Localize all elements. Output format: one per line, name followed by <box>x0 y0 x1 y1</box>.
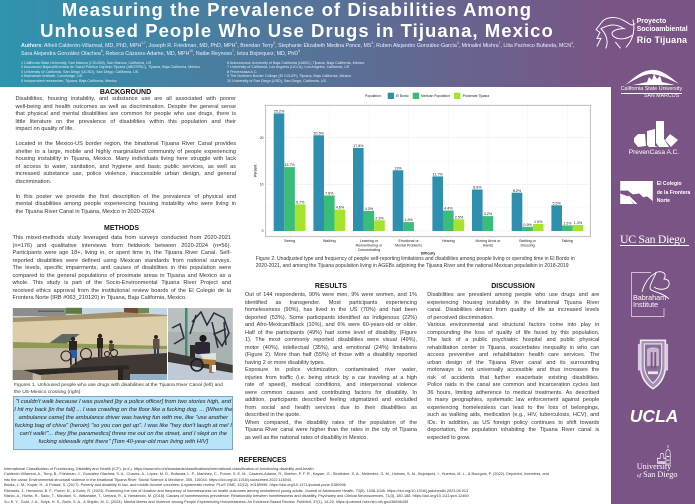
bars: seeing: 25.2% <box>274 110 285 114</box>
text block: results: from social and health services due to their disabilities as <box>245 405 417 411</box>
logo: El Colegio de la Frontera Norte <box>620 181 690 204</box>
caption: figure 1: Figures 1. Unhoused people who use drugs with disabilities at the Tijuana River Canal (left) and <box>14 382 223 388</box>
logo text <box>657 181 690 204</box>
bars: emotional <box>393 166 414 231</box>
bars: bathing <box>512 189 544 231</box>
bars: talking: 1.3% <box>574 221 583 225</box>
caption: figure 1: the US-Mexico crossing (right) <box>14 390 80 395</box>
text block: methods: Participants were age 18+, living in, or spent time in, the Tijuana River Canal. Self- <box>12 250 231 256</box>
text block: discussion: of perceived discrimination. <box>427 315 494 321</box>
logo text: Institute <box>633 300 658 309</box>
axis: difficulty categories: Dressing <box>521 243 535 247</box>
text block: discussion: experiencing homelessless can lead to the loss of belongings, <box>427 405 599 411</box>
axis: difficulty categories: Talking <box>562 239 573 243</box>
chart legend: El Bordo <box>396 94 409 98</box>
axis: difficulty categories <box>284 239 573 256</box>
text block: references: into the canal: Environmental structural violence in the binational Tijuana River. Social Science & Medicine, 305, 115044. https://doi.org/10.1016/j.socscimed.2022.115044 <box>4 478 291 482</box>
text block: discussion: canal. Disabilities detract from quality of life as increased levels <box>427 307 599 313</box>
caption: figure 2: Figure 2. Unadjusted type and frequency of people self-reporting limitations and disabilities among people living or spending time in El Bordo in <box>256 256 575 262</box>
text block: methods: (n=176) and qualitative interviews from fieldwork between 2020-2024 (n=56). <box>12 243 231 249</box>
bars: emotional: 13% <box>394 166 402 170</box>
text block: discussion: The lack of a public psychiatric hospital and public physical <box>427 337 599 343</box>
logo: UABC shield <box>638 340 668 390</box>
text block: results: When compared, the disability rates of the population of the <box>245 420 417 426</box>
bars: seeing <box>274 110 306 231</box>
text block: results: Exposure to police victimization, contaminated river water, <box>245 367 417 373</box>
text block: results: Out of 144 respondents, 90% were men, 9% were women, and 1% <box>245 292 417 298</box>
photos: figure 1 <box>12 308 233 380</box>
heading: results: RESULTS <box>315 282 347 290</box>
logo text: El Colegio <box>657 181 682 187</box>
text block: background: Disabilities, housing instability, and substance use are all associated with poorer <box>16 96 236 102</box>
bars: talking: 1.2% <box>563 222 572 226</box>
heading: methods: METHODS <box>104 225 139 232</box>
title <box>40 0 554 41</box>
logo: UC San Diego: UC San Diego <box>620 232 685 246</box>
axis: percent: 0 <box>262 229 264 233</box>
logo text: of San Diego <box>637 470 677 479</box>
logo text: Socioambiental <box>637 26 688 33</box>
axis: difficulty categories: Hearing <box>442 239 455 243</box>
panel: logo sidebar <box>611 0 695 504</box>
text block: discussion: Police raids in the canal are common and incarceration cycles last <box>427 382 599 388</box>
affiliations: left column: 5 Independent researcher, Tijuana, Baja California, Mexico <box>21 79 117 83</box>
text block: methods: whole. This study is part of the Socio-Environmental Tijuana River Project and <box>12 280 231 286</box>
bars: walking: 4.6% <box>336 206 345 210</box>
bars: bathing: 8.2% <box>513 189 522 193</box>
text block: discussion: experiencing housing instability in the binational Tijuana River <box>427 300 599 306</box>
text block: results: identified as transgender. Most participants experiencing <box>245 300 417 306</box>
logo text: Norte <box>657 198 670 204</box>
logo text <box>633 293 666 309</box>
text block: background: increased substance use, police violence, inaccessible urban design, and general <box>16 171 236 177</box>
text block: results: addition, participants described feeling stigmatized and excluded <box>245 397 417 403</box>
logo: UCLA: UCLA <box>630 406 678 426</box>
axis: percent: Percent <box>254 164 258 177</box>
affiliations: right column: 7 University of California, Los Angeles (UCLA), Los Angeles, California, US <box>227 65 349 69</box>
icon: mission towers <box>657 445 670 464</box>
bars: seeing: 5.7% <box>296 200 305 204</box>
text block: discussion: access preventive and rehabilitation health care services. The <box>427 352 599 358</box>
affiliations: left column: 2 Asociación Bajacaliforniana de Salud Pública Capítulo Tijuana (ABCSPAC), Tijuana, Baja California, Mexico <box>21 65 200 69</box>
text block: discussion: deportation, the population inhabiting the Tijuana River canal is <box>427 427 599 433</box>
axis: difficulty categories: Mental Problems <box>395 243 422 247</box>
logo text: PrevenCasa A.C. <box>629 149 679 156</box>
bars: hearing: 2.5% <box>455 215 464 219</box>
text block: background <box>16 96 236 215</box>
caption: figure 2: 2020-2021, and among the Tijuana population living in AGEBs adjoining the Tijuana River and the national Mexican population in 2018-2019 <box>256 263 569 269</box>
chart legend: Proximate Tijuana <box>463 94 489 98</box>
text block: references: Xu, K. Y., Gold, J. A., Szlyk, H. S., Bolin, S. A., & Shiplin, M. C. (2024). Mental Illness and Violence among People Experiencing Homelessness: An Evidence-Based Review. PubMed, 37(1), 14-20. https://pubmed.ncbi.nlm.nih.gov/38656439 <box>4 500 408 504</box>
icon: river emblem <box>595 17 636 49</box>
text block: discussion: motorways is not universally accessible and thus increases the <box>427 367 599 373</box>
logo text <box>636 462 678 479</box>
text block: discussion: compounding the loss of quality of life faced by this population. <box>427 330 599 336</box>
text block: references: Richards, J., Henwood, B. F., Porter, N., & Kuhn, R. (2023). Examining the role of duration and frequency of homelessness on health outcomes among unsheltered young adults. Journal of Adolescent Health, 73(6), 1038-1045. https://doi.org/10.1016/j.jadohealth.2023.06.013 <box>4 489 468 493</box>
bars: walking <box>313 131 345 231</box>
text block: methods: Frontera Norte (IRB #063_210120) in Tijuana, Baja California, Mexico. <box>12 295 187 301</box>
text block: references <box>4 467 549 504</box>
bars: walking: 7.6% <box>325 192 334 196</box>
text block: discussion: in many geographies, systematic law enforcement against people <box>427 397 599 403</box>
logo text: Río Tijuana <box>637 35 687 45</box>
text block: methods: This mixed-methods study leveraged data from surveys conducted from 2020-2021 <box>12 235 231 241</box>
authors: Sara Alejandra González Olachea5, Rebeca Cázares-Adame, MD, MPH10, Naibe Reynoso7, Ietza Bojorquez, MD, PhD9 <box>21 49 300 57</box>
bars: learning: 2.3% <box>375 216 384 220</box>
axis: difficulty categories: Difficulty <box>421 252 435 256</box>
text block: results: and Afro-Mexican/Black (10%), and 6% were 60-years-old or older. <box>245 322 417 328</box>
axis: difficulty categories: Hands <box>483 243 493 247</box>
bars: hearing: 11.7% <box>433 172 444 176</box>
affiliations: left column: 1 California State University, San Marcos (CSUSM), San Marcos, California, US <box>21 60 151 64</box>
axis: difficulty categories: Seeing <box>284 239 295 243</box>
logo text: Babraham <box>633 293 666 302</box>
text block: references: International Classification of Functioning, Disability and Health (ICF). (n.d.). https://www.who.int/standards/classifications/international-classification-of-functioning-disability-and-health <box>4 467 314 471</box>
panel: header band <box>0 0 695 87</box>
chart legend: Mexican Population <box>421 94 450 98</box>
text block: results: having 2 or more disability types. <box>245 360 325 366</box>
text block: results: rate of speed), medical conditions, and interpersonal violence <box>245 382 417 388</box>
text block: results: Half of the participants (49%) had some level of disability (Figure <box>245 330 417 336</box>
text block: discussion: risk of accidents that further exacerbate existing disabilities. <box>427 375 599 381</box>
text block: results: Tijuana River canal were higher than the rates in the city of Tijuana <box>245 427 417 433</box>
photo: Tijuana River Canal <box>13 308 167 380</box>
text block: methods: The levels, specific impairments, and causes of disabilities in this population were <box>12 265 231 271</box>
icon: mountains and campus <box>625 70 679 85</box>
logo: PrevenCasa A.C. <box>629 121 679 156</box>
chart legend <box>365 93 489 99</box>
text block: results: 1). The most commonly reported disabilities were visual (49%), <box>245 337 417 343</box>
bars: moving arms <box>472 186 493 231</box>
axis: difficulty categories: Walking <box>323 239 336 243</box>
bars: emotional: 1.9% <box>404 218 414 222</box>
bars: talking <box>551 201 583 231</box>
text block: results: as well as the national rates of disability in Mexico. <box>245 435 368 441</box>
callout: participant quote: can't walk!"... they [the paramedics] threw me out on the street, and I slept on the <box>20 431 227 437</box>
icon: swoosh and frame <box>631 271 670 317</box>
bars: moving arms: 8.9% <box>473 186 482 190</box>
logo: Proyecto Socioambiental Rio Tijuana <box>595 17 688 49</box>
photo: wheelchair user at US-Mexico crossing <box>168 308 233 380</box>
logo: University of San Diego <box>636 445 678 479</box>
caption: figure 1 <box>14 382 223 395</box>
bars: moving arms: 3.2% <box>484 212 493 216</box>
bars: bathing: 1.5% <box>534 220 543 224</box>
bars: learning <box>353 144 385 231</box>
axis: percent <box>254 136 264 233</box>
text block: background: discrimination. <box>16 179 51 185</box>
bars: hearing <box>432 172 464 231</box>
logo: California State University San Marcos <box>621 70 682 99</box>
logo: Babraham Institute <box>631 271 670 317</box>
text block: background: little literature on the prevalence of disabilities within this population and their <box>16 119 236 125</box>
affiliations: left column <box>21 60 200 83</box>
text block: discussion: urban design of the Tijuana River canal and its surrounding <box>427 360 599 366</box>
text block: results: injuries from traffic (i.e. being struck by a car traveling at a high <box>245 375 417 381</box>
text block: background: the Tijuana River Canal in Tijuana, Mexico in 2020-2024. <box>16 209 156 215</box>
authors <box>21 42 574 57</box>
text block: background: impact on quality of life. <box>16 126 74 132</box>
text block: discussion: such as walking aids, medication (e.g., HIV, tuberculosis, HCV), and <box>427 412 599 418</box>
axis: difficulty categories: Learning or <box>360 239 379 243</box>
bars: bathing: 0.9% <box>523 223 533 227</box>
heading: discussion: DISCUSSION <box>491 282 535 290</box>
plot frame and grid <box>266 105 590 237</box>
callout: participant quote: fucking sidewalk right there" [Tom 40-year-old man living with HIV] <box>38 439 208 445</box>
heading: references: REFERENCES <box>239 456 286 464</box>
title: Unhoused People Who Use Drugs in Tijuana, Mexico <box>40 20 554 41</box>
text block: discussion: Disabilities are prevalent among people who use drugs and are <box>427 292 599 298</box>
text block: discussion: expected to grow. <box>427 435 470 441</box>
callout: participant quote <box>13 396 233 450</box>
caption: figure 2 <box>256 256 575 269</box>
bars: learning: 17.8% <box>353 144 364 148</box>
axis: difficulty categories: Bathing or <box>519 239 537 243</box>
axis: difficulty categories: Emotional or <box>399 239 419 243</box>
callout: participant quote: "I couldn't walk because I was pushed [by a police officer] from two stories high, and <box>16 399 231 405</box>
text block: discussion: IDs. In addition, as US foreign policy continues to shift towards <box>427 420 599 426</box>
logo text: university name: California State University <box>621 86 682 92</box>
text block: background: Located in the Mexico-US border region, the binational Tijuana River Canal provides <box>16 141 236 147</box>
text block: references: Banks, L. M., Kuper, H., & Polack, S. (2017). Poverty and disability in low- and middle-income countries: A systematic review. PLoS ONE, 12(12), e0189996. https://doi.org/10.1371/journal.pone.0189996 <box>4 483 346 487</box>
bars: seeing: 13.7% <box>284 163 296 167</box>
bars: learning: 4.3% <box>365 207 374 211</box>
text block: discussion: rehabilitation center in Tijuana, exacerbates inequality in who can <box>427 345 599 351</box>
axis: difficulty categories: Remembering or <box>356 243 383 247</box>
logo text: University <box>637 462 671 471</box>
chart legend: Population: <box>365 94 382 98</box>
text block: background: that physical and mental disabilities are common for people who use drugs, there is <box>16 111 236 117</box>
text block: results: motor (40%), intellectual (35%), and emotional (24%) limitations <box>245 345 417 351</box>
text block: results: deported (53%). Some participants identified as Indigenous (22%) <box>245 315 417 321</box>
affiliations: right column: 8 Prevencasa A.C. <box>227 70 258 74</box>
callout: participant quote: fucking bag of chiva" (heroin) "so you can get up". I was like "hey don't laugh at me! I <box>15 423 232 429</box>
authors: Authors: Alheli Calderón-Villarreal, MD, PhD, MPH1,7, Joseph R. Friedman, MD, PhD, MPH1, Brendan Terry2, Stephanie Elizabeth Medina Ponce, MS3, Ruben Alejandro González-García4, Mrinalini Mishra7, Lilia Pacheco Bufanda, MCN4, <box>21 42 574 49</box>
text block: discussion <box>427 292 600 441</box>
bar chart: disability by population <box>254 92 591 256</box>
logo text: San Marcos: SAN MARCOS <box>644 93 679 99</box>
text block: background: of access to water, sanitation, and hygiene and basic public services, as well as <box>16 164 236 170</box>
text block: results: described in the quote. <box>245 412 301 418</box>
text block: results: (Figure 2). More than half (55%) of those with a disability reported <box>245 352 417 358</box>
text block: results: were common causes and contributing factors for disability. In <box>245 390 417 396</box>
axis: difficulty categories: Moving Arms or <box>476 239 501 243</box>
affiliations: right column: 10 University of San Diego (USD), San Diego, California, US <box>227 79 326 83</box>
heading: background: BACKGROUND <box>100 89 151 96</box>
bars: talking: 5.5% <box>552 201 562 205</box>
callout: participant quote: ambulance came] the ambulance driver was having fun with me, like "use another <box>18 415 228 421</box>
affiliations: left column: 3 University of California, San Diego (UCSD), San Diego, California, US <box>21 70 138 74</box>
callout: participant quote: I hit my back [in the fall] ... I was crawling on the floor like a fucking dog. ... [When the <box>14 407 232 413</box>
axis: difficulty categories: Concentrating <box>358 248 380 252</box>
logo text: Proyecto <box>637 18 666 25</box>
text block: references: Calderón-Villarreal, A., Terry, B., Friedman, J., González Olachea, S. A., Chavez, A., López, M. D., Bufanda, L. P., Martínez, C., Ponce, S. E. M., Cázares-Adame, R., Boehm, P. F. R., Kayser, G., Strathdee, S. A., Meléndez, G. M., Holmes, S. M., Bojorquez, I., Huertos, M. L., & Bourgois, P. (2022). Deported, homeless, and <box>4 472 549 476</box>
logo text <box>637 18 688 45</box>
text block: background: shelter to a large, mobile and highly marginalized community of people experiencing <box>16 149 236 155</box>
affiliations: right column: 9 The Northern Border College (El COLEF), Tijuana, Baja California, Mexico <box>227 74 351 78</box>
text block: results: homelessness (90%), has lived in the US (70%) and had been <box>245 307 417 313</box>
affiliations: right column: 6 Autonomous University of Baja California (UABC), Tijuana, Baja California, Mexico <box>227 60 364 64</box>
text block: results <box>245 292 417 441</box>
text block: background: mental disabilities among people experiencing housing instability who were living in <box>16 201 236 207</box>
bars: walking: 20.5% <box>313 131 325 135</box>
text block: methods: reported disabilities were defined using Mexican standards from national surveys. <box>12 258 231 264</box>
text block: background: In this poster we provide the first description of the prevalence of physical and <box>16 194 236 200</box>
text block: discussion: Various environmental and structural factors come into play in <box>427 322 599 328</box>
bars: hearing: 4.4% <box>444 207 453 211</box>
axis: percent: 20 <box>260 136 264 140</box>
text block: discussion: 36 hours, limiting adherence to medical treatments. As described <box>427 390 599 396</box>
text block: methods: compared to the general populations of proximate areas in Tijuana and Mexico as a <box>12 273 231 279</box>
axis: percent: 10 <box>260 182 264 186</box>
text block: background: well-being and health outcomes as well as discrimination. Despite the general sense <box>16 104 236 110</box>
text block: background: housing instability in Tijuana, Mexico. Many individuals living here struggle with lack <box>16 156 236 162</box>
icon: border map <box>620 181 653 204</box>
logo text: de la Frontera <box>657 190 690 196</box>
text block: references: Nishio, A., Horita, R., Sado, T., Mizutani, S., Watanabe, T., Uehara, R., & Yamamoto, M. (2016). Causes of homelessness prevalence: Relationship between homelessness and disability. Psychiatry and Clinical Neurosciences, 71(3), 180-188. https://doi.org/10.1111/pcn.12469 <box>4 494 469 498</box>
text block: methods: received ethics approval from the institutional review boards of the El Colegio de la <box>12 288 231 294</box>
text block: methods <box>12 235 231 301</box>
icon: stepped blocks <box>634 121 678 147</box>
affiliations: right column <box>227 60 364 83</box>
affiliations: left column: 4 Babraham Institute, Cambridge, UK <box>21 74 82 78</box>
